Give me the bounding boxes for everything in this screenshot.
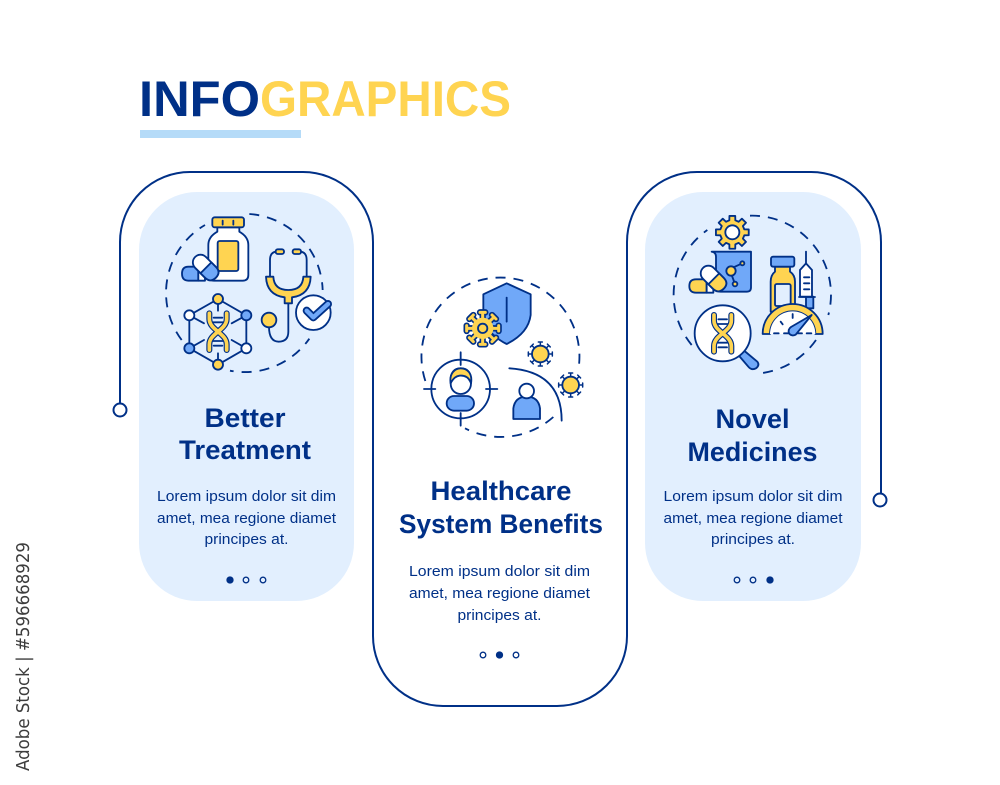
- connecting outline: [120, 172, 881, 706]
- icon: targeted person: [424, 352, 497, 426]
- panel: novel medicines: [645, 192, 861, 601]
- icon: gear: [716, 216, 749, 249]
- icon: dna network: [184, 294, 251, 370]
- panel background right: [645, 192, 861, 601]
- icon: magnifier: [695, 305, 758, 369]
- body text: [664, 489, 842, 548]
- outline start dot: [114, 404, 126, 416]
- body text: amet, mea regione diamet: [664, 511, 842, 527]
- body text: principes at.: [711, 532, 795, 548]
- icon: small virus 2: [559, 373, 583, 397]
- icon: syringe: [799, 252, 815, 308]
- panel: healthcare system benefits: [399, 278, 603, 658]
- panel background left: [139, 192, 354, 601]
- body text: principes at.: [458, 608, 542, 624]
- icon: vial: [771, 257, 795, 312]
- pagination dots: [734, 577, 773, 583]
- heading: Novel: [716, 404, 790, 434]
- heading: [688, 404, 818, 467]
- icon: large virus: [467, 312, 499, 344]
- heading: Medicines: [688, 437, 818, 467]
- outline end dot: [874, 494, 886, 506]
- icon: bottle: [182, 217, 248, 283]
- title: [139, 71, 511, 127]
- body text: [157, 489, 336, 548]
- body text: amet, mea regione diamet: [157, 511, 336, 527]
- body text: amet, mea regione diamet: [409, 586, 590, 602]
- pagination dots: [480, 652, 519, 658]
- icon: beaker: [689, 252, 751, 294]
- body text: Lorem ipsum dolor sit dim: [409, 564, 590, 580]
- heading: Better: [204, 403, 286, 433]
- heading: System Benefits: [399, 509, 603, 539]
- title: GRAPHICS: [260, 71, 511, 127]
- icon: medicines: [674, 216, 831, 373]
- icon: healthcare: [421, 278, 583, 437]
- heading: Treatment: [179, 435, 311, 465]
- body text: Lorem ipsum dolor sit dim: [664, 489, 842, 505]
- icon: shield: [483, 283, 531, 344]
- icon: protected person: [509, 368, 562, 421]
- body text: Lorem ipsum dolor sit dim: [157, 489, 336, 505]
- stock credit: Adobe Stock | #596668929: [13, 542, 34, 771]
- icon: stethoscope: [262, 249, 331, 342]
- body text: principes at.: [204, 532, 288, 548]
- title: INFO: [139, 71, 260, 127]
- heading: [179, 403, 311, 465]
- icon: small virus: [528, 342, 552, 366]
- icon: gauge: [763, 304, 823, 335]
- heading: Healthcare: [430, 476, 572, 506]
- icon: treatment: [166, 214, 331, 372]
- title underline: [140, 130, 301, 138]
- pagination dots: [227, 577, 266, 583]
- body text: [409, 564, 590, 624]
- panel: better treatment: [139, 192, 354, 601]
- heading: [399, 476, 603, 539]
